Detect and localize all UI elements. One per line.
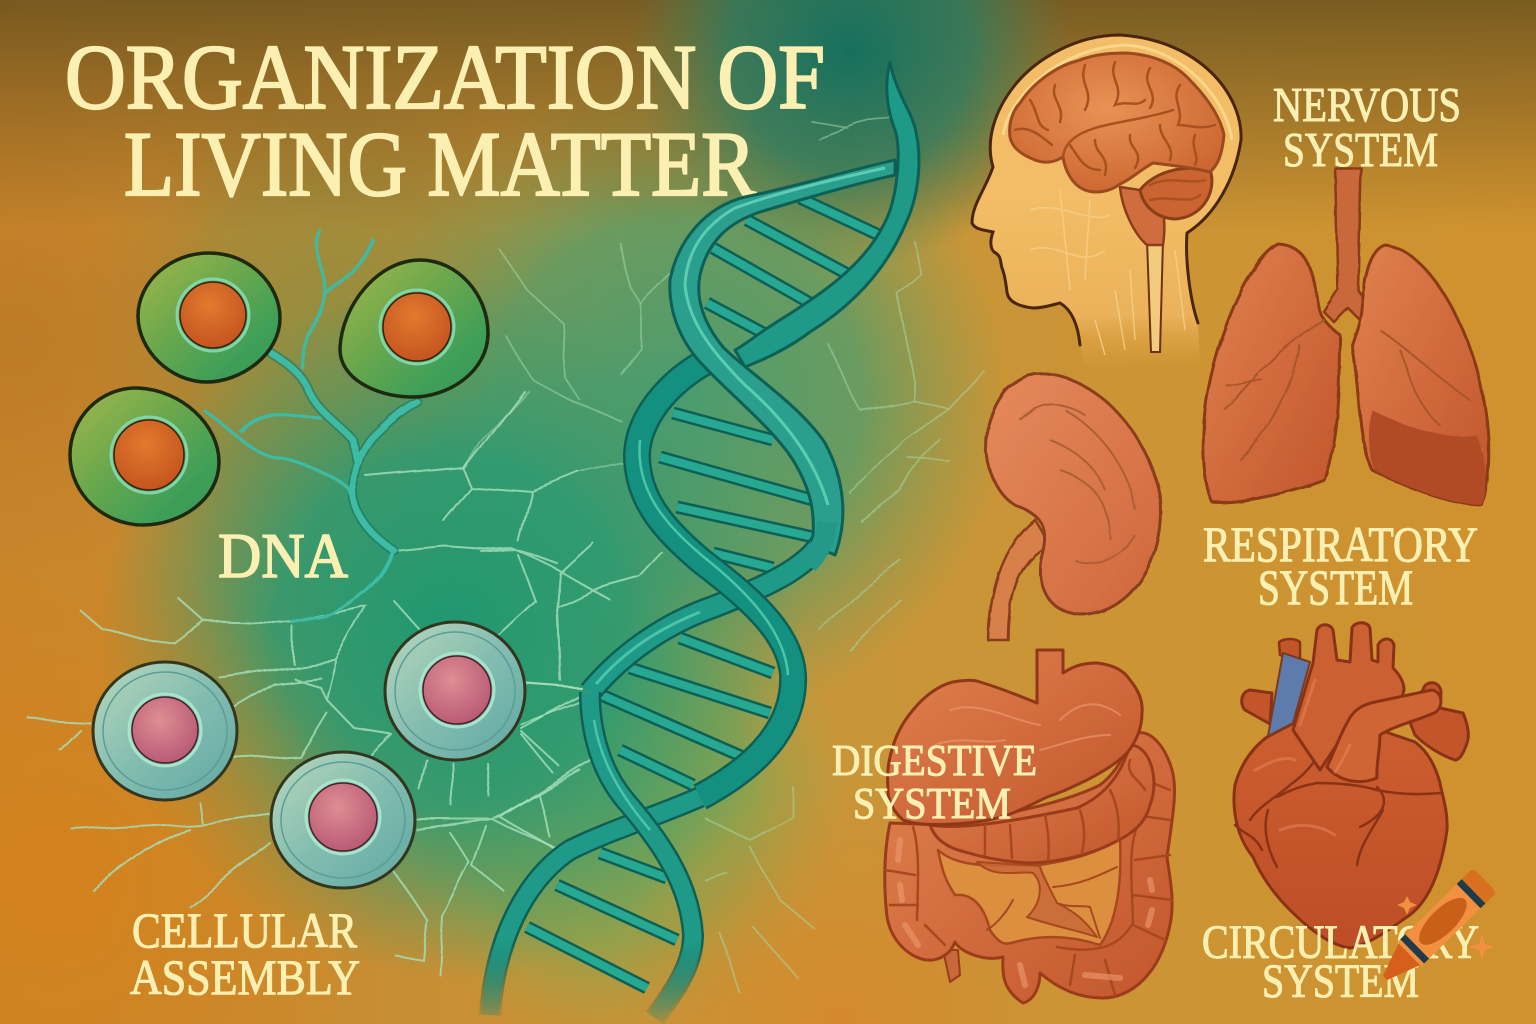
head with brain: [972, 35, 1241, 365]
kidney body: [986, 374, 1160, 615]
cell top right: [340, 260, 488, 397]
brain folds: [1015, 62, 1215, 200]
label: cellular assembly: CELLULAR: [132, 902, 358, 958]
icon: crayon watermark: [1373, 868, 1497, 990]
label: nervous system: SYSTEM: [1283, 122, 1438, 177]
brain stem: [1120, 187, 1164, 245]
pale filaments on the right: [463, 115, 985, 993]
green cells: [70, 253, 488, 525]
pale cell right: [385, 622, 525, 760]
helix rungs: [527, 198, 883, 988]
label: circulatory system: CIRCULATORY: [1202, 916, 1479, 969]
title: [65, 26, 825, 215]
mesentery interior: [938, 838, 1120, 945]
mesentery lines: [987, 867, 1117, 938]
right back vessels: [1405, 683, 1468, 760]
spinal cord: [1147, 240, 1163, 352]
heart grooves: [1235, 763, 1440, 867]
label: nervous system: [1273, 77, 1461, 177]
label: DNA: DNA: [218, 520, 348, 591]
skull rim highlights: [1003, 45, 1232, 140]
ascending aorta and branches: [1293, 623, 1404, 770]
brain: [1010, 53, 1224, 192]
heart: [1234, 623, 1468, 948]
rectum: [943, 950, 960, 982]
colon silhouette: [885, 733, 1175, 1003]
label: respiratory system: RESPIRATORY: [1203, 516, 1478, 572]
crayon body: [1373, 868, 1497, 990]
colon lumps: [885, 780, 1172, 995]
kidney: [986, 374, 1160, 640]
right lower lobe: [1368, 410, 1486, 505]
upper right ribbon with tail: [735, 62, 919, 367]
blue vena cava: [1268, 639, 1310, 736]
neck and face fibres: [1030, 190, 1185, 355]
label: digestive system: DIGESTIVE: [832, 736, 1037, 785]
stomach: [888, 650, 1142, 825]
sparkles: [1397, 896, 1417, 915]
kidney texture: [1020, 404, 1135, 564]
label: nervous system: NERVOUS: [1273, 77, 1461, 132]
stomach folds: [935, 704, 1120, 750]
pale cell left: [93, 662, 237, 800]
label: digestive system: [832, 736, 1037, 828]
right lung: [1352, 245, 1489, 505]
DNA double helix: [490, 62, 919, 1018]
winding strand: [490, 362, 793, 1015]
front ribbon: [670, 160, 895, 555]
neural filament network: [30, 115, 985, 993]
cell top left: [138, 253, 280, 382]
strand segment to junction: [590, 530, 828, 692]
title: ORGANIZATION OF: [65, 26, 825, 128]
head silhouette: [972, 35, 1241, 365]
ureter: [988, 520, 1050, 640]
pale cell bottom: [271, 752, 415, 888]
cell left: [70, 388, 219, 525]
small intestine folds: [977, 862, 1097, 937]
lung veins: [1225, 320, 1470, 460]
label: respiratory system: [1203, 516, 1478, 615]
title: LIVING MATTER: [124, 113, 757, 215]
head outline: [972, 35, 1241, 345]
pale filaments in the centre: [30, 390, 662, 975]
label: circulatory system: [1202, 916, 1479, 1008]
transverse colon: [930, 745, 1154, 863]
pale cells: [93, 622, 525, 888]
label: cellular assembly: [130, 902, 360, 1005]
lower crossing strand: [590, 692, 693, 1018]
left lung: [1203, 244, 1340, 502]
ribbon highlight: [685, 168, 885, 505]
left vessel: [1242, 690, 1272, 724]
lungs: [1203, 168, 1489, 505]
cerebellum: [1140, 168, 1212, 219]
colon highlights: [898, 840, 1152, 985]
label: circulatory system: SYSTEM: [1262, 955, 1419, 1008]
label: respiratory system: SYSTEM: [1258, 559, 1413, 615]
ribbon joint cover: [808, 522, 827, 564]
transverse colon lumps: [985, 760, 1145, 860]
label: digestive system: SYSTEM: [853, 779, 1011, 828]
pulmonary artery: [1327, 690, 1441, 782]
label: cellular assembly: ASSEMBLY: [130, 949, 360, 1005]
heart highlights: [1255, 680, 1350, 835]
heart body: [1234, 720, 1447, 948]
teal branches: [270, 352, 417, 550]
trachea: [1324, 168, 1372, 322]
digestive organs: [885, 650, 1175, 1003]
